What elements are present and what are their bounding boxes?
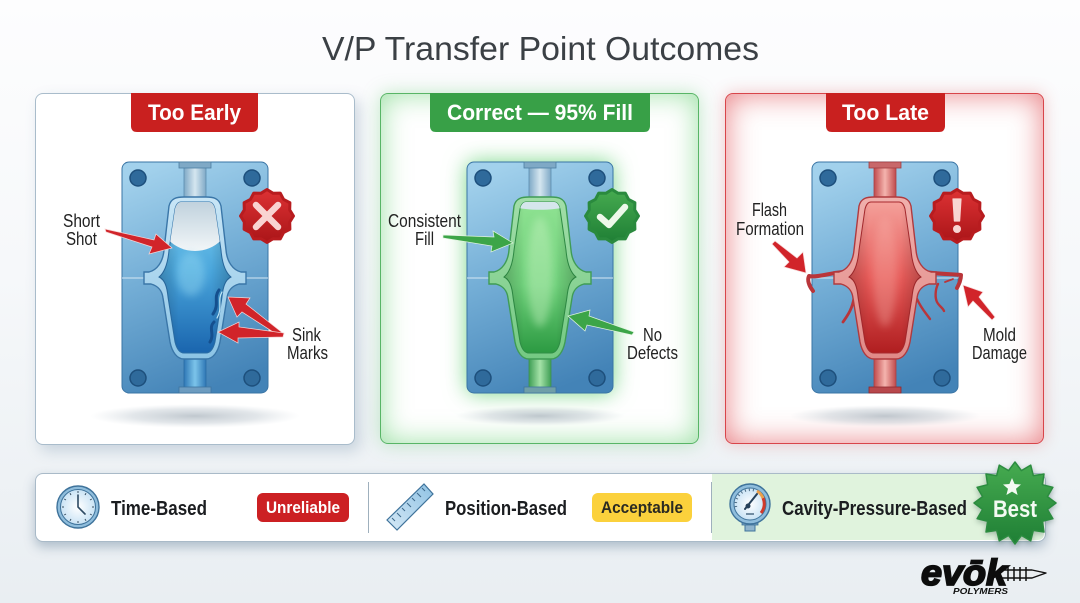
panel: too early <box>35 93 355 445</box>
heading tab: too early: Too Early <box>148 100 242 125</box>
sink marks <box>210 290 222 342</box>
label: time-based: Time-Based <box>111 498 207 520</box>
label: no defects: Defects <box>627 343 678 363</box>
label: sink marks <box>287 325 328 363</box>
status pill: unreliable: Unreliable <box>266 498 340 517</box>
floor shadow <box>789 405 981 427</box>
label: consistent fill <box>388 211 461 249</box>
badge: best <box>974 462 1056 544</box>
label: short shot: Shot <box>66 229 97 249</box>
mold diagram: short shot <box>122 162 268 393</box>
logo: evok polymers: evōk <box>921 552 1009 593</box>
arrow: consistent fill <box>443 231 513 252</box>
mold diagram: flash <box>808 162 961 393</box>
label: consistent fill: Consistent <box>388 211 461 231</box>
panel: too late <box>725 93 1044 444</box>
floor shadow <box>90 404 300 428</box>
label: no defects: No <box>643 325 662 345</box>
label: sink marks: Marks <box>287 343 328 363</box>
status pill: acceptable <box>592 493 692 522</box>
heading tab: correct: Correct — 95% Fill <box>447 100 633 125</box>
label: short shot: Short <box>63 211 100 231</box>
flash formation <box>808 272 961 322</box>
label: position-based: Position-Based <box>445 498 567 520</box>
mold diagram: correct fill <box>467 162 613 393</box>
status pill: acceptable: Acceptable <box>601 498 683 517</box>
label: flash formation: Formation <box>736 219 804 239</box>
arrow: short shot <box>105 229 172 254</box>
icon: clock <box>57 486 99 528</box>
arrow: no defects <box>568 310 634 335</box>
panel: correct 95% fill <box>380 93 699 444</box>
heading tab: correct <box>430 93 650 132</box>
label: mold damage: Damage <box>972 343 1027 363</box>
arrow: mold damage <box>963 285 995 320</box>
logo: evok polymers <box>921 552 1047 596</box>
label: no defects <box>627 325 678 363</box>
badge: best: Best <box>993 496 1037 523</box>
badge: error x <box>240 190 294 242</box>
logo: evok polymers: POLYMERS <box>953 586 1008 596</box>
badge: check <box>586 190 638 242</box>
heading tab: too late <box>826 93 945 132</box>
icon: pressure gauge <box>730 484 770 531</box>
title: V/P Transfer Point Outcomes <box>322 30 759 67</box>
best method highlight <box>712 474 1044 540</box>
arrow: flash formation <box>772 241 806 273</box>
status pill: unreliable <box>257 493 349 522</box>
heading tab: too late: Too Late <box>842 100 929 125</box>
floor shadow <box>455 406 625 426</box>
label: cavity-pressure-based: Cavity-Pressure-Based <box>782 498 967 520</box>
label: flash formation <box>736 200 804 239</box>
heading tab: too early <box>131 93 258 132</box>
icon: ruler <box>387 484 433 530</box>
arrows: sink marks <box>218 297 284 343</box>
label: consistent fill: Fill <box>415 229 434 249</box>
label: sink marks: Sink <box>292 325 322 345</box>
comparison bar <box>35 473 1046 542</box>
label: mold damage <box>972 325 1027 363</box>
label: mold damage: Mold <box>983 325 1016 345</box>
badge: warning <box>930 190 984 242</box>
label: short shot <box>63 211 100 249</box>
label: flash formation: Flash <box>752 200 787 220</box>
